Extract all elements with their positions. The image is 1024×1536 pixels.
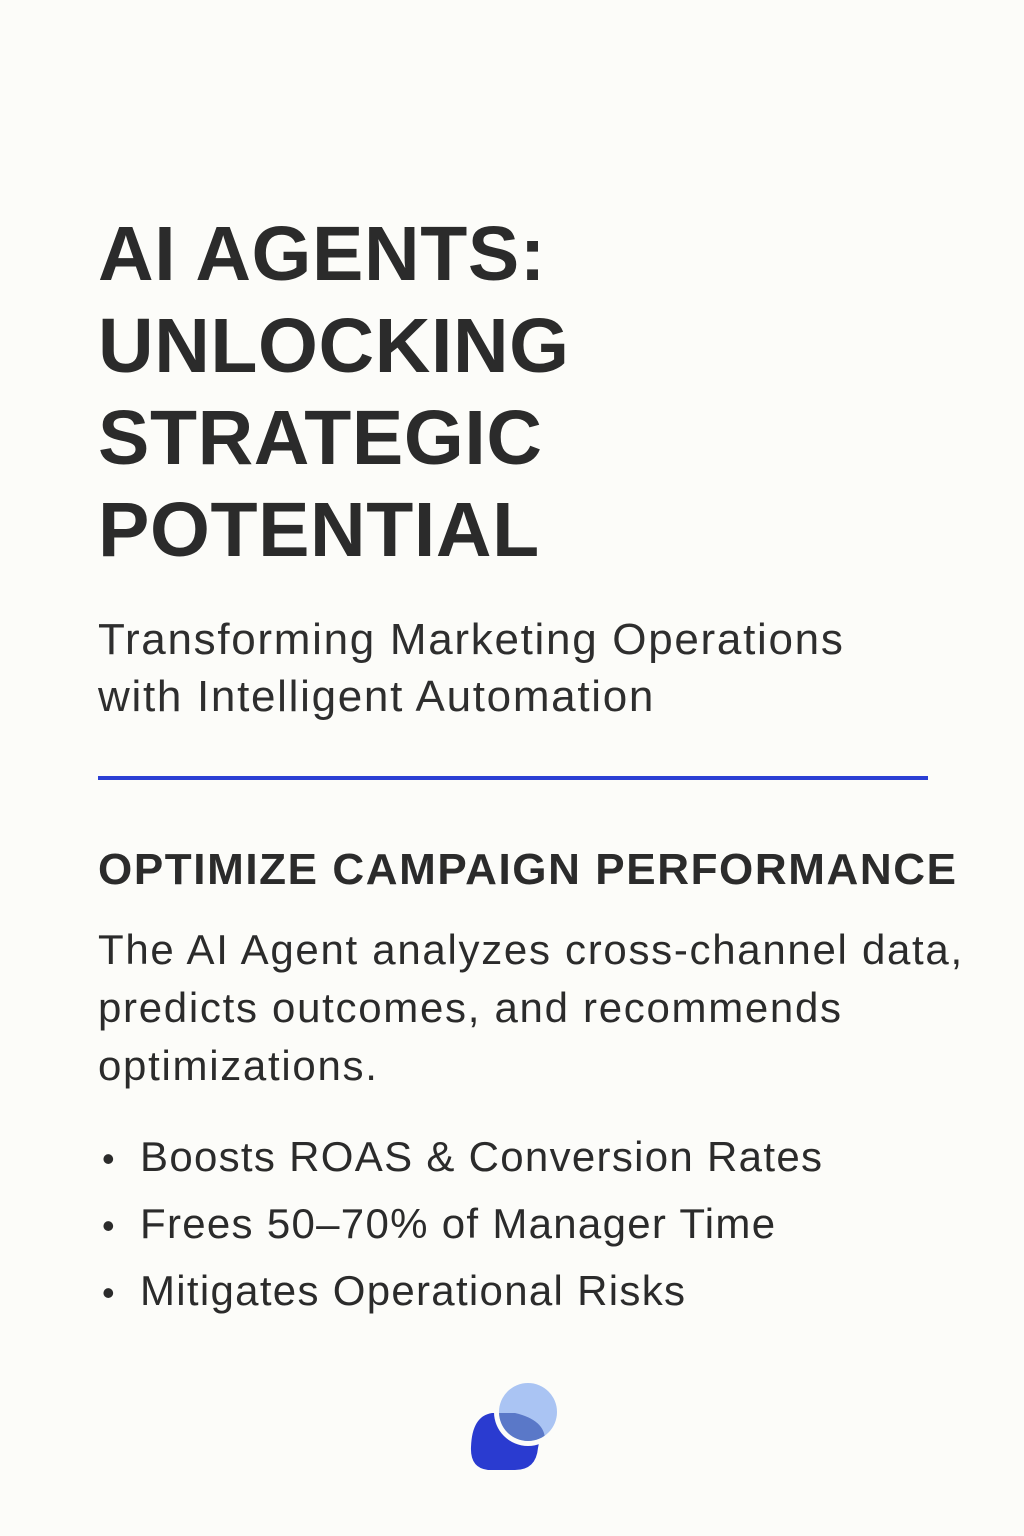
body text: [98, 926, 964, 1089]
divider line: [98, 776, 928, 780]
bullet list: •: [102, 1205, 116, 1246]
bullet list: [102, 1133, 823, 1314]
bullet list: •: [102, 1138, 116, 1179]
body text: predicts outcomes, and recommends: [98, 984, 843, 1031]
subtitle: Transforming Marketing Operations: [98, 615, 845, 664]
bullet list: Mitigates Operational Risks: [140, 1267, 686, 1314]
title: AI AGENTS:: [98, 211, 546, 297]
body text: The AI Agent analyzes cross-channel data,: [98, 926, 964, 973]
title: STRATEGIC: [98, 395, 543, 481]
icon: logo: [470, 1383, 557, 1470]
body text: optimizations.: [98, 1042, 379, 1089]
title: POTENTIAL: [98, 487, 540, 573]
subtitle: with Intelligent Automation: [98, 672, 655, 721]
bullet list: Boosts ROAS & Conversion Rates: [140, 1133, 823, 1180]
title: [98, 211, 570, 573]
section heading: OPTIMIZE CAMPAIGN PERFORMANCE: [98, 845, 958, 894]
bullet list: •: [102, 1272, 116, 1313]
title: UNLOCKING: [98, 303, 570, 389]
subtitle: [98, 615, 845, 721]
bullet list: Frees 50–70% of Manager Time: [140, 1200, 776, 1247]
